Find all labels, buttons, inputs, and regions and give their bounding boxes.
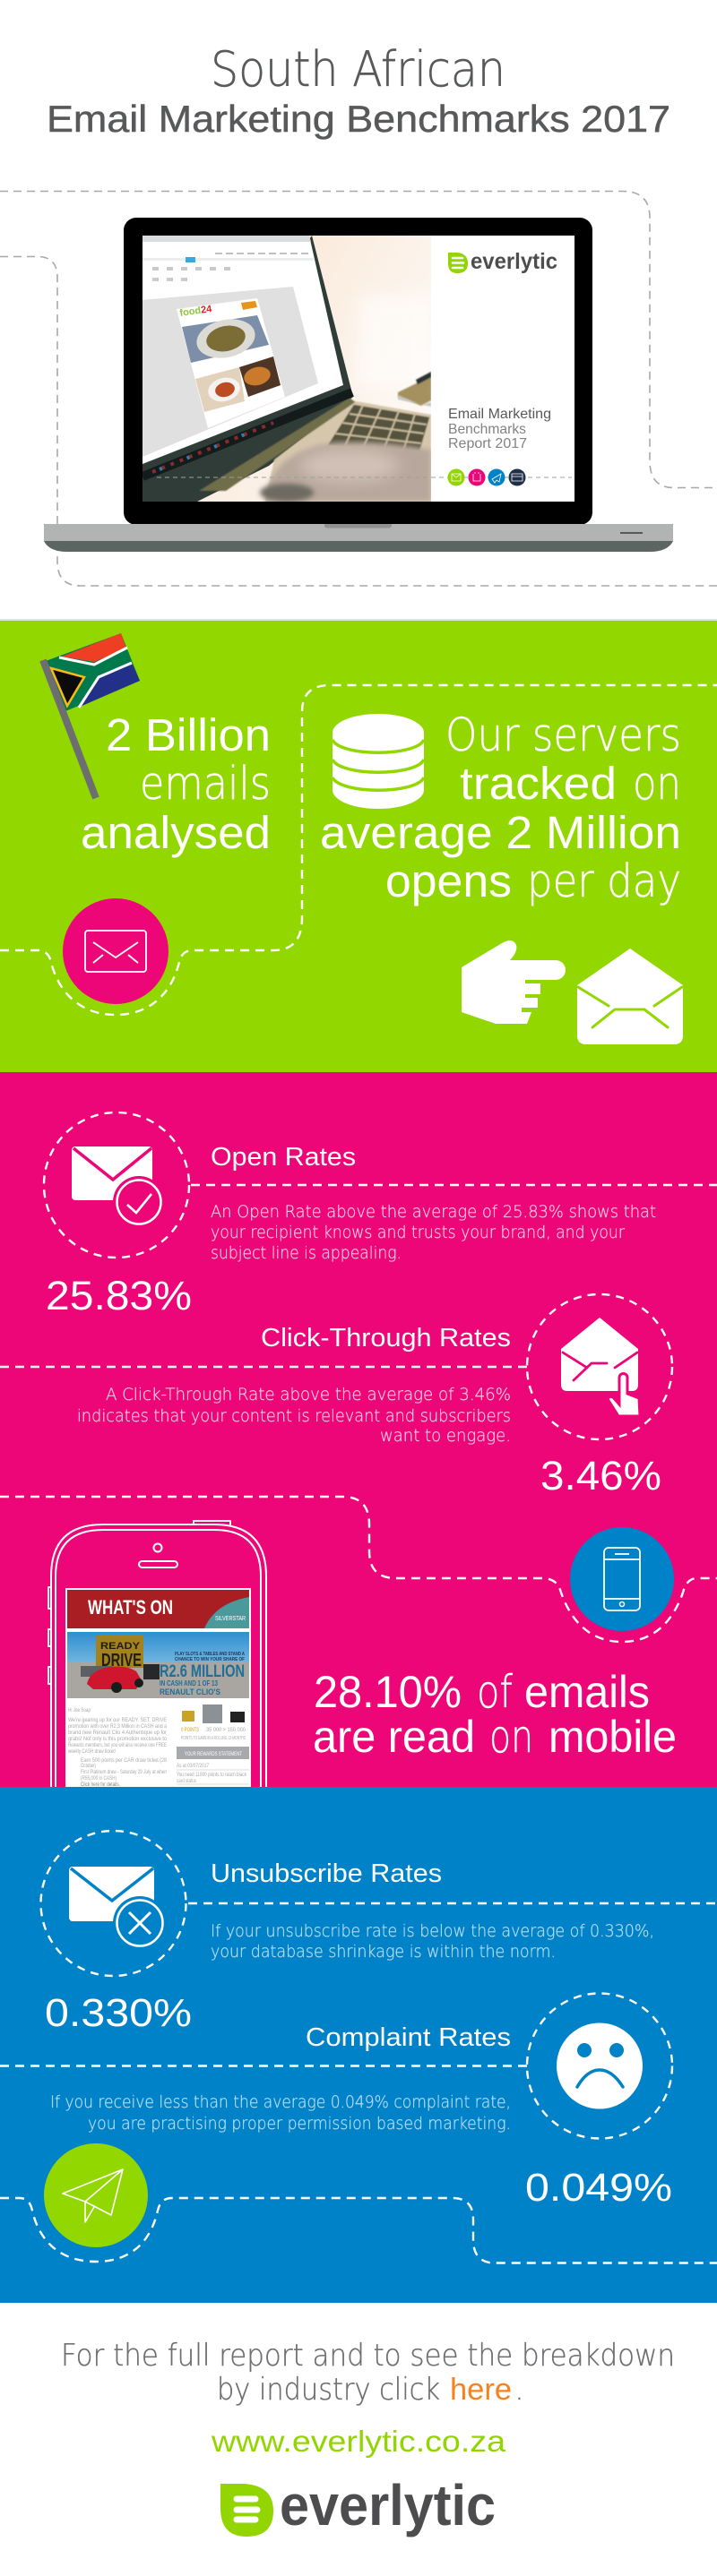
email rewards column: You need 11000 points to reach black <box>177 1773 247 1778</box>
email rewards column: POINTS TO EARN IN A ROLLING 12-MONTHS <box>181 1736 246 1741</box>
heading: complaint rates: Complaint Rates <box>306 2023 511 2052</box>
divider: unsubscribe <box>188 1902 717 1904</box>
text: call to action <box>61 2338 675 2408</box>
tracked: tracked <box>460 758 617 809</box>
text: mobile stat <box>313 1666 677 1763</box>
email rewards column: YOUR REWARDS STATEMENT <box>185 1751 242 1757</box>
opens: opens <box>385 855 512 906</box>
unsubscribe circle and icon <box>41 1831 186 1976</box>
click-through circle and icon <box>527 1294 672 1439</box>
logo word: everlytic <box>280 2473 496 2537</box>
stat: 3.46%: 3.46% <box>540 1453 661 1498</box>
icon: database <box>333 714 424 809</box>
text: open rates body: your recipient knows and trusts your brand, and your <box>211 1223 625 1242</box>
hero title: READY <box>100 1641 141 1652</box>
icon: open envelope <box>577 949 683 1044</box>
complaint circle and icon <box>527 1994 672 2139</box>
email hero: car promotion <box>67 1632 249 1698</box>
divider: complaint <box>0 2065 527 2067</box>
emails: emails <box>140 758 271 811</box>
logo mark <box>448 253 468 273</box>
email body copy: (R55,000 in CASH) <box>81 1776 117 1782</box>
email body copy: Click here for details. <box>81 1782 120 1788</box>
banner heading: WHAT'S ON <box>88 1596 173 1619</box>
stat: 25.83%: 25.83% <box>46 1273 192 1318</box>
text: 2 billion emails analysed <box>81 709 271 858</box>
per day: per day <box>527 855 681 908</box>
logo <box>220 2473 496 2537</box>
email hero: car promotion: CHANCE TO WIN YOUR SHARE OF <box>175 1657 246 1662</box>
report line 2: Benchmarks <box>448 422 526 437</box>
email banner: what's on <box>67 1590 249 1628</box>
stat: 0.049%: 0.049% <box>525 2166 672 2210</box>
icon: green paper plane circle <box>44 2143 148 2247</box>
phone mockup <box>48 1521 266 1790</box>
dashed route: blue panel <box>0 2198 717 2263</box>
banner brand: SILVERSTAR <box>215 1616 246 1622</box>
email body copy: weekly CASH draw ticket! <box>67 1749 116 1755</box>
email body copy <box>67 1708 168 1788</box>
panel: pink rates <box>0 1072 717 1790</box>
phone outline <box>48 1521 266 1790</box>
text: complaint body <box>50 2092 511 2134</box>
dashed route: pink panel <box>0 1497 717 1642</box>
cta line 2: by industry click <box>217 2372 440 2408</box>
email rewards column: 35 000 > 150 000 <box>206 1728 246 1733</box>
mobile: mobile <box>549 1712 677 1762</box>
icon: pink envelope circle <box>63 898 168 1004</box>
open rates circle and icon <box>44 1112 189 1258</box>
screen report title <box>448 407 551 451</box>
cta line 1: For the full report and to see the breakdown <box>61 2338 675 2374</box>
text: servers tracked opens <box>320 709 681 908</box>
laptop screen white panel <box>431 236 574 502</box>
28.10%: 28.10% <box>314 1667 462 1717</box>
screenshot logo: food24: food24 <box>179 304 213 319</box>
logo mark <box>220 2484 273 2537</box>
hero sub: IN CASH AND 1 OF 13 <box>160 1679 218 1687</box>
email body copy: October) <box>81 1764 96 1769</box>
emails: emails <box>524 1667 650 1717</box>
text: open rates body: An Open Rate above the average of 25.83% shows that <box>211 1202 656 1222</box>
panel: blue rates <box>0 1787 717 2303</box>
text: click-through body: want to engage. <box>380 1426 511 1446</box>
on: on <box>633 758 681 811</box>
text: open rates body: subject line is appealing. <box>211 1243 402 1263</box>
2 billion: 2 Billion <box>106 709 271 760</box>
email body copy: We're gearing up for our READY. SET. DRIVE <box>68 1718 167 1723</box>
text: complaint body: If you receive less than the average 0.049% complaint rate, <box>50 2092 511 2112</box>
text: open rates body <box>211 1202 656 1263</box>
panel: header <box>0 48 717 587</box>
email body copy: brand new Renault Clio 4 Authentique up for <box>68 1730 167 1736</box>
laptop base <box>44 524 673 541</box>
text: click-through body: indicates that your content is relevant and subscribers <box>77 1406 511 1426</box>
email rewards column: card status <box>177 1779 196 1784</box>
email rewards column: As at 03/07/2017 <box>177 1764 210 1769</box>
dashed route: top right <box>0 192 717 487</box>
icon: south african flag <box>43 633 140 798</box>
title line 1: South African <box>211 41 505 98</box>
screen icon circles <box>448 469 525 485</box>
panel: footer <box>0 2303 717 2576</box>
laptop <box>44 218 673 552</box>
of: of <box>477 1666 513 1718</box>
email body copy: promotion with over R2,3 Million in CASH and a <box>68 1724 168 1730</box>
title line 2: Email Marketing Benchmarks 2017 <box>47 98 670 140</box>
analysed: analysed <box>81 807 271 858</box>
heading: unsubscribe rates: Unsubscribe Rates <box>211 1859 442 1888</box>
email body copy: Rewards members, but you will also receive one FREE <box>68 1743 167 1748</box>
text: unsubscribe body: If your unsubscribe rate is below the average of 0.330%, <box>211 1921 654 1941</box>
cta period: . <box>514 2372 524 2408</box>
heading: click-through rates: Click-Through Rates <box>261 1324 511 1352</box>
divider: click-through <box>0 1366 527 1368</box>
email rewards column <box>177 1704 249 1784</box>
stat: 0.330%: 0.330% <box>45 1991 192 2035</box>
email rewards column: 0 POINTS <box>181 1728 199 1733</box>
logo word: everlytic <box>471 249 557 274</box>
average 2 million: average 2 Million <box>320 807 681 858</box>
on: on <box>489 1711 533 1763</box>
icon: blue phone circle <box>570 1527 674 1631</box>
screen logo <box>448 249 557 274</box>
email hero: car promotion: RENAULT CLIO'S <box>160 1687 220 1696</box>
heading: open rates: Open Rates <box>211 1143 356 1172</box>
text: complaint body: you are practising proper permission based marketing. <box>88 2114 511 2134</box>
email body copy: Hi Joe Soap <box>68 1708 91 1713</box>
dashed route: left bottom <box>0 256 717 586</box>
text: unsubscribe body <box>211 1921 654 1962</box>
icon: pointing hand <box>462 940 566 1024</box>
text: click-through body: A Click-Through Rate above the average of 3.46% <box>106 1385 511 1404</box>
are read: are read <box>313 1712 475 1762</box>
report line 1: Email Marketing <box>448 407 551 422</box>
screen dashed line <box>157 477 572 478</box>
hero promo date: PLAY SLOTS & TABLES AND STAND A <box>175 1652 245 1657</box>
email hero: car promotion: DRIVE <box>101 1651 142 1670</box>
our servers: Our servers <box>445 709 681 762</box>
divider: open rates <box>191 1184 717 1186</box>
icon: envelope cross <box>69 1867 167 1950</box>
email body copy: Earn 500 points per CAR draw ticket (28 <box>81 1758 168 1764</box>
dashed route: green panel <box>0 685 717 1015</box>
phone screen <box>65 1588 251 1789</box>
email body copy: First Platinum draw - Saturday 29 July at when <box>81 1770 167 1775</box>
text: click-through body <box>77 1385 511 1446</box>
icon: envelope click <box>561 1318 640 1416</box>
text: unsubscribe body: your database shrinkage is within the norm. <box>211 1942 556 1962</box>
icon: envelope check <box>72 1146 165 1228</box>
hero amount: R2.6 MILLION <box>160 1662 245 1681</box>
panel: green stats <box>0 619 717 1072</box>
laptop screen photo <box>142 236 431 502</box>
cta link: here <box>450 2373 512 2407</box>
text: website: www.everlytic.co.za <box>211 2425 506 2458</box>
email body copy: grabs! Not only is this promotion exclusive to <box>68 1737 168 1742</box>
report line 3: Report 2017 <box>448 436 527 451</box>
icon: sad face <box>557 2022 643 2108</box>
laptop bezel <box>124 218 592 525</box>
